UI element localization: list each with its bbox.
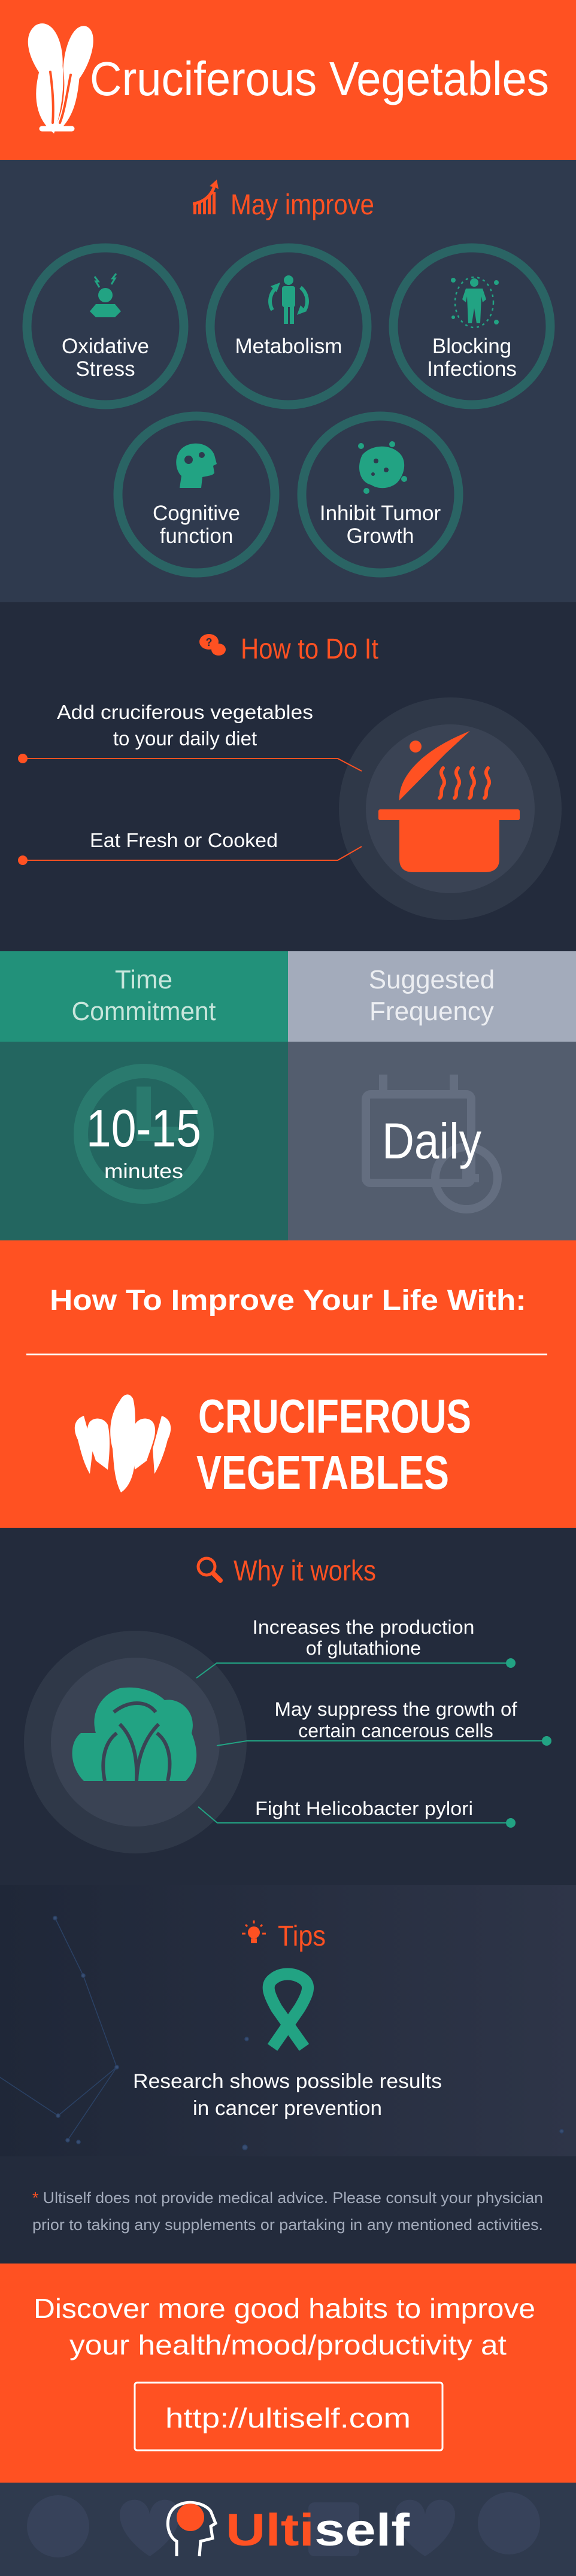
callout: helicobacter [198,1798,516,1828]
panel: time commitment: Time [115,965,172,994]
heading: tips: Tips [278,1920,326,1952]
cabbage illustration [24,1631,247,1853]
title: Cruciferous Vegetables [90,52,549,105]
panel: suggested frequency: Frequency [369,997,494,1026]
circle: metabolism [210,248,367,405]
panel: how to improve your life: How To Improve Your Life With: [50,1285,526,1316]
circle: blocking infections [393,248,550,405]
heading: why it works: Why it works [234,1555,376,1587]
circle: inhibit tumor growth [302,416,459,573]
heading: tips [242,1920,326,1952]
heading: may improve [193,180,374,221]
panel: suggested frequency: Daily [382,1113,481,1169]
icon: stressed person [90,274,121,317]
circle: oxidative stress [27,248,184,405]
panel: how to do it [0,602,576,951]
panel: time commitment: 10-15 [86,1099,201,1158]
circle: oxidative stress: Oxidative [62,335,149,358]
circle: metabolism: Metabolism [235,335,342,358]
panel: call to action: your health/mood/productivity at [69,2329,507,2360]
icon: faded clock [81,1071,207,1197]
heading: how to do it: How to Do It [241,633,378,665]
callout: add to diet [18,701,362,771]
panel: suggested frequency [288,951,576,1240]
circle: cognitive function: Cognitive [153,502,240,525]
panel: tips: Research shows possible results [133,2070,442,2093]
icon: bok choy [31,26,90,129]
pot illustration [339,697,562,920]
url button [135,2383,442,2450]
panel: how to improve your life [0,1240,576,1528]
circle: cognitive function [118,416,275,573]
circle: blocking infections: Blocking [432,335,511,358]
icon: head with gears [176,444,217,488]
disclaimer: prior to taking any supplements or partaking in any mentioned activities. [32,2216,543,2234]
panel: time commitment: Commitment [72,997,216,1026]
panel: may improve [0,160,576,602]
heading: how to do it [199,633,378,665]
panel: how to improve your life: VEGETABLES [196,1446,449,1499]
circle: blocking infections: Infections [427,357,517,381]
disclaimer [0,2156,576,2264]
panel: tips [0,1885,576,2156]
heading: how to do it: ? [206,636,212,648]
logo: ultiself [168,2502,410,2556]
callout: eat fresh or cooked [18,829,362,865]
panel: tips: in cancer prevention [193,2097,382,2120]
url button: http://ultiself.com [165,2402,411,2434]
callout: cancerous cells: certain cancerous cells [298,1720,493,1741]
icon: awareness ribbon [269,1974,308,2047]
panel: suggested frequency: Suggested [369,965,495,994]
icon: faded calendar [366,1075,498,1209]
callout: add to diet: to your daily diet [113,727,257,750]
icon: protected person [451,277,499,327]
callout: cancerous cells [217,1698,551,1746]
callout: glutathione [196,1616,516,1678]
logo: ultiself: self [314,2505,410,2556]
header banner [0,0,576,160]
icon: cabbage leaves [75,1394,171,1492]
panel: why it works [0,1528,576,1885]
footer [0,2483,576,2576]
callout: helicobacter: Fight Helicobacter pylori [255,1798,473,1819]
callout: eat fresh or cooked: Eat Fresh or Cooked [90,829,278,851]
panel: time commitment: minutes [104,1160,183,1183]
panel: call to action [0,2264,576,2483]
callout: glutathione: Increases the production [253,1616,474,1638]
circle: oxidative stress: Stress [75,357,135,381]
callout: cancerous cells: May suppress the growth of [274,1698,517,1720]
panel: time commitment [0,951,288,1240]
callout: add to diet: Add cruciferous vegetables [57,701,313,723]
icon: person with arrows [270,275,307,324]
callout: glutathione: of glutathione [306,1637,421,1659]
panel: how to improve your life: CRUCIFEROUS [198,1389,471,1443]
circle: cognitive function: function [160,524,233,548]
disclaimer: * Ultiself does not provide medical advice. Please consult your physician [32,2189,543,2207]
icon: tumor cell [358,441,407,494]
logo: ultiself: Ulti [226,2505,314,2556]
heading: may improve: May improve [231,189,374,221]
circle: inhibit tumor growth: Growth [347,524,414,548]
circle: inhibit tumor growth: Inhibit Tumor [320,502,441,525]
panel: call to action: Discover more good habits to improve [34,2293,535,2324]
